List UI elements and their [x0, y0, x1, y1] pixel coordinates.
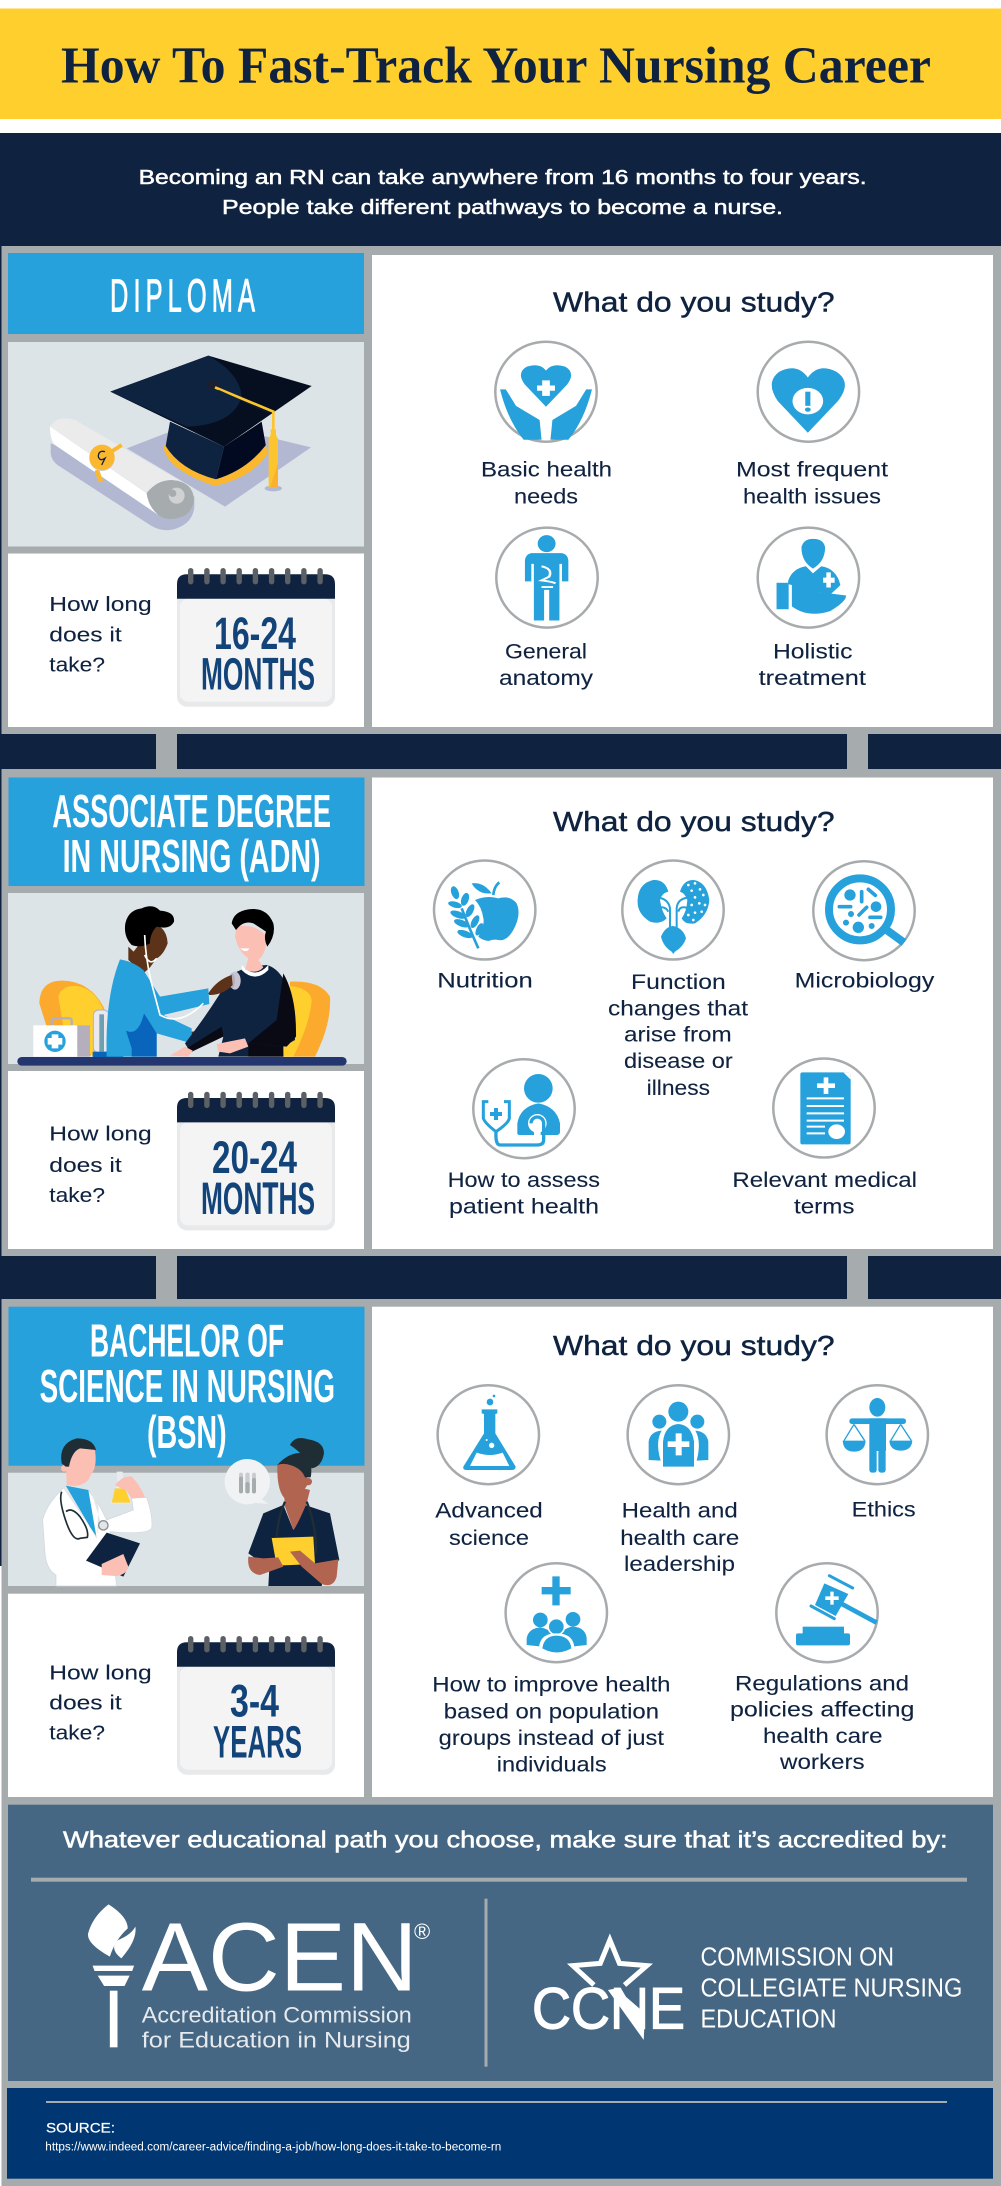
- item: relevant medical terms: terms: [794, 1196, 854, 1219]
- logo: ACEN: Accreditation Commission: [142, 2003, 412, 2028]
- BSN heading: BACHELOR OF: [90, 1315, 284, 1367]
- item: function changes: [608, 860, 748, 1100]
- source footer: [7, 2088, 993, 2179]
- logo: CCNE: EDUCATION: [700, 2003, 836, 2033]
- item: health care leadership: Health and: [622, 1500, 738, 1523]
- study heading: What do you study?: [553, 806, 835, 837]
- item: microbiology: [795, 861, 935, 993]
- logo: ACEN: [88, 1903, 430, 2052]
- ADN heading: ASSOCIATE DEGREE: [52, 785, 331, 837]
- item: function changes: disease or: [624, 1050, 733, 1073]
- question text: does it: [49, 624, 122, 647]
- calendar: 16-24 months: MONTHS: [201, 649, 315, 700]
- question text: does it: [49, 1154, 122, 1177]
- item: function changes: arise from: [624, 1024, 732, 1047]
- panel: associate degree: [2, 769, 1001, 1256]
- item: improve population health: individuals: [497, 1754, 607, 1777]
- diploma heading: DIPLOMA: [110, 270, 260, 322]
- illustration: nurse examining patient: [8, 893, 364, 1066]
- item: basic health needs: [481, 342, 612, 508]
- item: advanced science: science: [449, 1527, 529, 1550]
- question text: How long: [49, 593, 152, 616]
- question text: take?: [49, 654, 105, 677]
- source footer: https://www.indeed.com/career-advice/finding-a-job/how-long-does-it-take-to-become-rn: [45, 2142, 501, 2154]
- calendar: 20-24 months: 20-24: [212, 1132, 297, 1183]
- question text: How long: [49, 1661, 152, 1684]
- logo: ACEN: ®: [414, 1919, 430, 1944]
- item: basic health needs: needs: [514, 486, 578, 508]
- item: how to assess patient health: patient health: [449, 1196, 599, 1219]
- item: most frequent health issues: Most frequent: [736, 459, 888, 482]
- BSN heading: SCIENCE IN NURSING: [40, 1360, 335, 1412]
- item: microbiology: Microbiology: [795, 970, 935, 993]
- item: holistic treatment: treatment: [759, 667, 866, 690]
- panel: bachelor of science: [2, 1299, 1001, 1804]
- item: improve population health: groups instead of just: [439, 1727, 664, 1750]
- logo: CCNE: COMMISSION ON: [700, 1942, 894, 1972]
- item: improve population health: How to improve health: [432, 1674, 670, 1697]
- study panel: ADN: [372, 778, 993, 1249]
- item: improve population health: based on population: [444, 1700, 659, 1723]
- item: health care leadership: health care: [620, 1527, 739, 1550]
- source footer: SOURCE:: [46, 2120, 115, 2136]
- question text: take?: [49, 1721, 105, 1744]
- intro band: People take different pathways to become a nurse.: [222, 197, 783, 219]
- item: holistic treatment: [758, 528, 866, 690]
- diploma heading: [8, 253, 364, 334]
- accreditation heading: Whatever educational path you choose, make sure that it’s accredited by:: [63, 1826, 948, 1852]
- item: how to assess patient health: [448, 1059, 600, 1219]
- item: regulations and policies: policies affecting: [730, 1699, 914, 1722]
- item: general anatomy: General: [505, 640, 587, 663]
- illustration: doctor and nurse: [8, 1438, 364, 1586]
- item: how to assess patient health: How to assess: [448, 1169, 600, 1192]
- title banner: [0, 8, 1001, 119]
- logo: CCNE: COLLEGIATE NURSING: [700, 1973, 962, 2003]
- item: nutrition: Nutrition: [437, 970, 533, 993]
- item: health care leadership: leadership: [624, 1553, 735, 1576]
- panel: accreditation: [2, 1804, 1001, 2186]
- item: basic health needs: Basic health: [481, 459, 612, 482]
- calendar: 3-4 years: 3-4: [230, 1676, 279, 1727]
- item: general anatomy: [496, 528, 598, 690]
- item: ethics: Ethics: [852, 1499, 916, 1522]
- intro band: Becoming an RN can take anywhere from 16 months to four years.: [139, 167, 867, 189]
- calendar: 16-24 months: 16-24: [214, 608, 296, 659]
- BSN heading: (BSN): [147, 1406, 227, 1458]
- panel: diploma: [2, 246, 1001, 734]
- item: most frequent health issues: health issues: [743, 486, 881, 508]
- item: ethics: [827, 1385, 928, 1522]
- calendar: 3-4 years: [177, 1636, 335, 1775]
- item: function changes: Function: [631, 971, 726, 994]
- duration block: ADN: [8, 1071, 364, 1249]
- BSN heading: [8, 1307, 364, 1466]
- question text: take?: [49, 1184, 105, 1207]
- ADN heading: [8, 778, 364, 886]
- icon: torch: [88, 1904, 136, 2047]
- calendar: 3-4 years: YEARS: [213, 1716, 302, 1767]
- item: regulations and policies: [730, 1563, 914, 1774]
- item: health care leadership: [620, 1385, 739, 1576]
- item: nutrition: [434, 860, 535, 993]
- intro band: [0, 133, 1001, 246]
- item: improve population health: [432, 1563, 670, 1777]
- question text: does it: [49, 1691, 122, 1714]
- study heading: What do you study?: [553, 286, 835, 318]
- question text: [49, 593, 152, 677]
- title banner: How To Fast-Track Your Nursing Career: [61, 38, 931, 94]
- study panel: BSN: [372, 1307, 993, 1797]
- item: regulations and policies: health care: [763, 1725, 882, 1748]
- item: advanced science: Advanced: [435, 1500, 543, 1523]
- question text: How long: [49, 1123, 152, 1146]
- logo: ACEN: ACEN: [142, 1903, 418, 2012]
- item: general anatomy: anatomy: [499, 667, 594, 690]
- duration block: diploma: [8, 554, 364, 727]
- logo: CCNE: CCNE: [532, 1976, 685, 2041]
- item: relevant medical terms: Relevant medical: [732, 1169, 917, 1192]
- item: function changes: changes that: [608, 998, 748, 1021]
- item: most frequent health issues: [736, 342, 888, 508]
- logo: ACEN: for Education in Nursing: [142, 2027, 411, 2052]
- item: function changes: illness: [647, 1077, 710, 1100]
- item: regulations and policies: Regulations and: [735, 1673, 909, 1696]
- icon: star: [573, 1940, 647, 2040]
- calendar: 20-24 months: [177, 1092, 335, 1230]
- duration block: BSN: [8, 1594, 364, 1797]
- item: holistic treatment: Holistic: [773, 640, 852, 663]
- question text: [49, 1123, 152, 1207]
- calendar: 16-24 months: [177, 568, 335, 707]
- question text: [49, 1661, 152, 1744]
- study panel: diploma: [372, 255, 993, 727]
- logo: CCNE: [532, 1940, 962, 2041]
- item: regulations and policies: workers: [779, 1751, 865, 1774]
- study heading: What do you study?: [553, 1330, 835, 1361]
- calendar: 20-24 months: MONTHS: [201, 1173, 315, 1224]
- illustration: graduation cap and scroll: [8, 342, 364, 546]
- item: advanced science: [435, 1385, 543, 1550]
- ADN heading: IN NURSING (ADN): [63, 830, 321, 882]
- item: relevant medical terms: [732, 1058, 917, 1219]
